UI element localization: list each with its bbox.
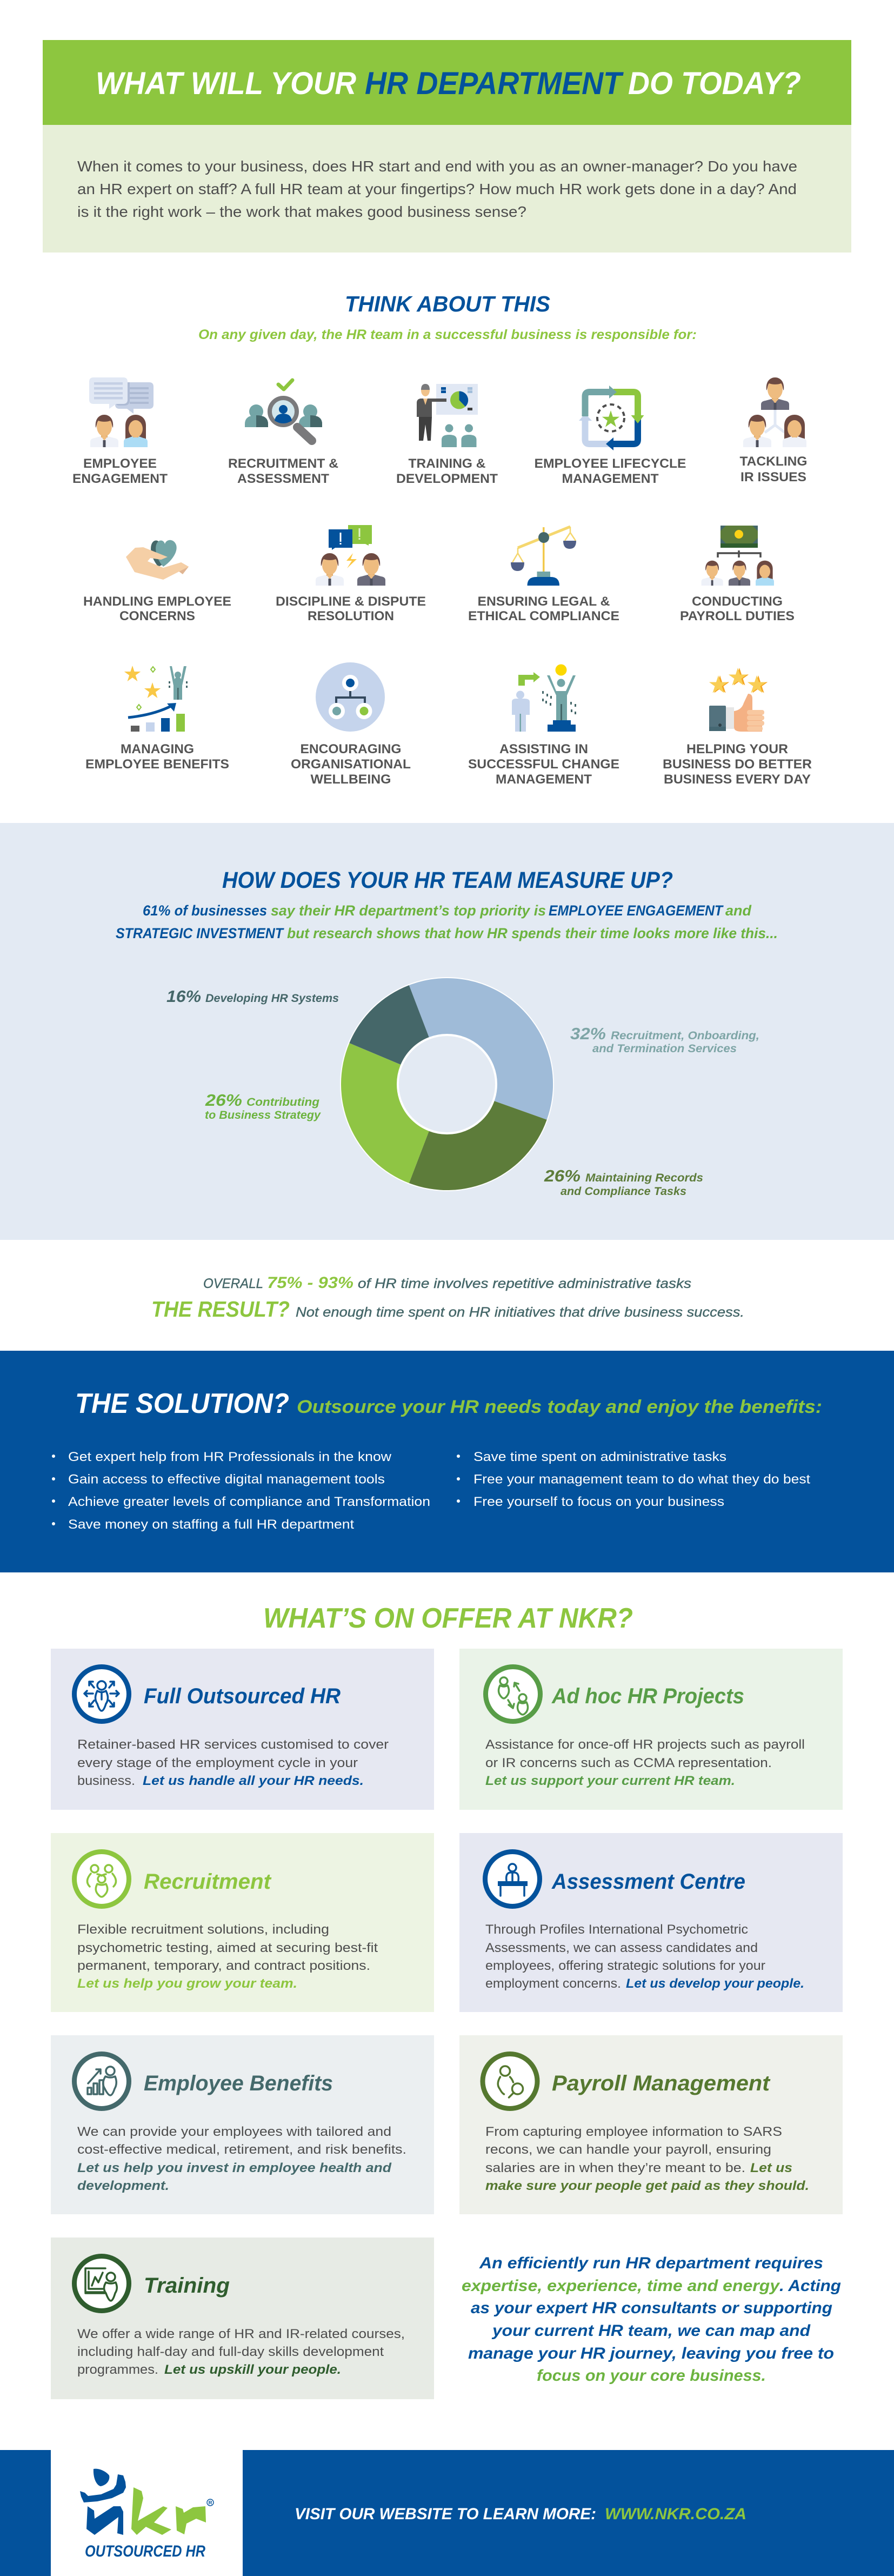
item: managing employee benefits: EMPLOYEE BENEFITS [85, 757, 229, 772]
card text [77, 2327, 405, 2377]
icon: organisation chart in circle [316, 662, 385, 732]
card text: make sure your people get paid as they should. [485, 2179, 809, 2193]
statement text: say their HR department’s top priority is [271, 902, 546, 919]
item: ensuring legal and ethical compliance: ETHICAL COMPLIANCE [468, 609, 619, 623]
icon: scales [511, 527, 576, 586]
card: ad hoc HR projects [459, 1649, 843, 1810]
card title: Employee Benefits [144, 2072, 333, 2095]
callout: efficiently run HR department [462, 2254, 841, 2385]
item: encouraging organisational wellbeing: ORGANISATIONAL [291, 757, 411, 772]
item: assisting in successful change management: MANAGEMENT [496, 772, 592, 787]
item: employee engagement [72, 377, 168, 486]
card text: including half-day and full-day skills development [77, 2345, 384, 2359]
card title: Full Outsourced HR [144, 1684, 341, 1708]
item: tackling IR issues: TACKLING [739, 454, 808, 469]
label: 16 percent developing HR systems: 16% [166, 987, 201, 1006]
item: managing employee benefits [85, 666, 229, 772]
card text: Let us support your current HR team. [485, 1774, 735, 1788]
card text: Let us help you grow your team. [77, 1976, 297, 1991]
icon: trainer with screen [75, 2256, 129, 2311]
panel: how does your HR team measure up [0, 823, 894, 1240]
card text [77, 1737, 389, 1788]
card text [485, 1922, 804, 1991]
callout: efficiently run HR department: expertise, experience, time and energy [462, 2277, 780, 2295]
icon: lifecycle arrows [579, 386, 644, 450]
icon: person with growth chart [75, 2054, 129, 2109]
card text: Let us [750, 2161, 792, 2175]
item: employee engagement: ENGAGEMENT [72, 472, 168, 486]
label: 26 percent maintaining records: 26% [544, 1166, 581, 1185]
statement text: EMPLOYEE ENGAGEMENT [549, 902, 724, 919]
icon: two people exchanging [485, 1667, 541, 1722]
item: encouraging organisational wellbeing: ENCOURAGING [301, 742, 401, 756]
card text: From capturing employee information to SARS [485, 2124, 782, 2139]
item: training and development [396, 384, 498, 486]
item: assisting in successful change management [468, 664, 619, 787]
label: 32 percent recruitment: and Termination Services [592, 1043, 737, 1055]
item: training and development: DEVELOPMENT [396, 472, 498, 486]
callout: efficiently run HR department: An efficiently run HR department requires [479, 2254, 823, 2272]
label: 26 percent maintaining records: and Compliance Tasks [561, 1185, 686, 1198]
card text: Let us upskill your people. [164, 2362, 341, 2377]
item: discipline and dispute resolution [276, 525, 426, 623]
item: recruitment and assessment [228, 380, 338, 486]
benefits list: left column: Gain access to effective digital management tools [68, 1472, 385, 1487]
statement text [116, 902, 778, 941]
card text: recons, we can handle your payroll, ensuring [485, 2142, 771, 2157]
icon: person with outward arrows [75, 1667, 129, 1722]
card text [77, 2124, 406, 2193]
icon: two people talking [89, 377, 154, 447]
label: 32 percent recruitment [570, 1024, 759, 1055]
text block: overall admin time [203, 1274, 691, 1292]
text block: the result [151, 1297, 744, 1322]
icon: banknote above staff [702, 526, 774, 586]
item: discipline and dispute resolution: DISCIPLINE & DISPUTE [276, 594, 426, 609]
item: assisting in successful change management: ASSISTING IN [499, 742, 588, 756]
icon: hand holding heart [126, 540, 189, 580]
text block: overall admin time: 75% - 93% [267, 1274, 353, 1292]
benefits list: left column: Achieve greater levels of compliance and Transformation [68, 1495, 430, 1509]
card text: programmes. [77, 2362, 158, 2377]
callout: efficiently run HR department: focus on your core business. [537, 2367, 766, 2385]
card text: psychometric testing, aimed at securing best-fit [77, 1941, 378, 1955]
label: 26 percent contributing to strategy: to Business Strategy [205, 1109, 321, 1121]
label: 26 percent contributing to strategy [205, 1091, 321, 1121]
card text: Flexible recruitment solutions, including [77, 1922, 329, 1937]
heading: HOW DOES YOUR HR TEAM MEASURE UP? [222, 867, 673, 893]
item: conducting payroll duties [680, 526, 795, 623]
text block: the result: Not enough time spent on HR initiatives that drive business success. [296, 1305, 744, 1320]
label: 26 percent maintaining records: Maintaining Records [585, 1172, 703, 1184]
label: 32 percent recruitment: Recruitment, Onboarding, [611, 1030, 759, 1042]
icon: group of people [75, 1851, 129, 1907]
logo: NKR outsourced HR: OUTSOURCED HR [85, 2542, 205, 2560]
donut chart [340, 977, 554, 1191]
text block: overall admin time: of HR time involves repetitive administrative tasks [358, 1276, 691, 1291]
item: ensuring legal and ethical compliance [468, 527, 619, 623]
label: 26 percent contributing to strategy: 26% [205, 1091, 242, 1110]
card text: Let us develop your people. [626, 1976, 804, 1991]
icon: stars and growth bars [124, 666, 188, 732]
subheading: responsibilities: On any given day, the HR team in a successful business is responsible for: [198, 327, 697, 342]
card text: business. [77, 1774, 135, 1788]
heading: think about this: THINK ABOUT THIS [345, 291, 550, 316]
heading: THE SOLUTION? [75, 1388, 289, 1419]
benefits list: right column [457, 1450, 810, 1509]
statement text: and [725, 902, 752, 919]
heading [75, 1388, 822, 1419]
item: conducting payroll duties: PAYROLL DUTIES [680, 609, 795, 623]
statement text: STRATEGIC INVESTMENT [116, 925, 285, 941]
card: training [51, 2238, 434, 2399]
benefits list: left column: Get expert help from HR Professionals in the know [68, 1450, 392, 1464]
card text: or IR concerns such as CCMA representation. [485, 1756, 772, 1770]
card title: Payroll Management [552, 2072, 771, 2095]
card text: Let us handle all your HR needs. [143, 1774, 364, 1788]
benefits list: left column: Save money on staffing a full HR department [68, 1517, 354, 1532]
item: helping your business do better: BUSINESS EVERY DAY [664, 772, 811, 787]
item: helping your business do better: HELPING YOUR [686, 742, 788, 756]
item: handling employee concerns: CONCERNS [119, 609, 195, 623]
title: HR DEPARTMENT [365, 66, 624, 101]
item: training and development: TRAINING & [409, 456, 485, 471]
item: managing employee benefits: MANAGING [121, 742, 194, 756]
label: 26 percent maintaining records [544, 1166, 703, 1198]
card: full outsourced HR [51, 1649, 434, 1810]
panel: the solution [0, 1351, 894, 1572]
icon: thumbs up with stars [709, 668, 768, 732]
item: conducting payroll duties: CONDUCTING [692, 594, 783, 609]
label: 26 percent contributing to strategy: Contributing [246, 1096, 319, 1108]
item: handling employee concerns: HANDLING EMPLOYEE [83, 594, 231, 609]
card text: every stage of the employment cycle in your [77, 1756, 358, 1770]
label: 16 percent developing HR systems: Developing HR Systems [205, 992, 339, 1005]
panel: title banner [43, 40, 851, 125]
item: assisting in successful change management: SUCCESSFUL CHANGE [468, 757, 619, 772]
item: encouraging organisational wellbeing [291, 662, 411, 787]
card text: permanent, temporary, and contract positions. [77, 1958, 370, 1973]
item: employee lifecycle management: EMPLOYEE LIFECYCLE [534, 456, 686, 471]
callout: efficiently run HR department: your current HR team, we can map and [491, 2322, 811, 2340]
title: WHAT WILL YOUR [96, 66, 356, 101]
card text: We can provide your employees with tailored and [77, 2124, 391, 2139]
card title: Training [144, 2274, 230, 2298]
heading: what's on offer: WHAT’S ON OFFER AT NKR? [263, 1603, 633, 1634]
icon: magnifier over candidates [245, 380, 322, 441]
label: 32 percent recruitment: 32% [570, 1024, 606, 1043]
title [96, 66, 801, 101]
heading: Outsource your HR needs today and enjoy the benefits: [297, 1397, 822, 1417]
icon: two people in dispute [316, 525, 385, 586]
card text: Assessments, we can assess candidates and [485, 1941, 758, 1955]
logo: NKR outsourced HR [80, 2469, 214, 2560]
call to action: WWW.NKR.CO.ZA [605, 2505, 746, 2523]
panel: intro text: an HR expert on staff? A full HR team at your fingertips? How much HR work gets done in a day? And [77, 181, 797, 197]
panel: intro text [43, 125, 851, 253]
item: encouraging organisational wellbeing: WELLBEING [310, 772, 391, 787]
card text: We offer a wide range of HR and IR-related courses, [77, 2327, 405, 2341]
benefits list: right column: Save time spent on administrative tasks [473, 1450, 726, 1464]
panel: intro text: is it the right work – the work that makes good business sense? [77, 203, 526, 220]
item: helping your business do better: BUSINESS DO BETTER [663, 757, 812, 772]
item: employee lifecycle management: MANAGEMENT [562, 472, 659, 486]
statement text: 61% of businesses [143, 902, 267, 919]
statement text: but research shows that how HR spends their time looks more like this... [287, 925, 778, 941]
card title: Ad hoc HR Projects [551, 1684, 744, 1708]
card text: Assistance for once-off HR projects such as payroll [485, 1737, 805, 1752]
card text: cost-effective medical, retirement, and risk benefits. [77, 2142, 406, 2157]
card text [77, 1922, 378, 1991]
icon: person transforming into leader [512, 664, 576, 732]
item: handling employee concerns [83, 540, 231, 623]
call to action: VISIT OUR WEBSITE TO LEARN MORE: [295, 2505, 596, 2523]
panel: intro text: When it comes to your business, does HR start and end with you as an owner-manager? Do you have [77, 158, 797, 175]
card: employee benefits [51, 2035, 434, 2214]
card text: Through Profiles International Psychometric [485, 1922, 748, 1937]
card text: Let us help you invest in employee health and [77, 2161, 392, 2175]
label: 16 percent developing HR systems [166, 987, 339, 1006]
callout: efficiently run HR department: manage your HR journey, leaving you free to [468, 2345, 834, 2362]
panel: footer [0, 2450, 894, 2576]
item: employee engagement: EMPLOYEE [83, 456, 157, 471]
item: recruitment and assessment: RECRUITMENT & [228, 456, 338, 471]
card text: development. [77, 2179, 169, 2193]
card text [485, 2124, 809, 2193]
callout: efficiently run HR department: as your expert HR consultants or supporting [471, 2299, 832, 2317]
item: helping your business do better [663, 668, 812, 787]
card text: employees, offering strategic solutions for your [485, 1958, 765, 1973]
card: payroll management [459, 2035, 843, 2214]
card text: salaries are in when they’re meant to be. [485, 2161, 745, 2175]
card: recruitment [51, 1833, 434, 2012]
card: assessment centre [459, 1833, 843, 2012]
call to action [295, 2505, 746, 2523]
logo: NKR outsourced HR: R [209, 2500, 212, 2506]
benefits list: right column: Free your management team to do what they do best [473, 1472, 810, 1487]
icon: presenter with chart [417, 384, 478, 447]
item: ensuring legal and ethical compliance: ENSURING LEGAL & [478, 594, 610, 609]
card text: employment concerns. [485, 1976, 621, 1991]
text block: overall admin time: OVERALL [203, 1276, 263, 1291]
item: tackling IR issues: IR ISSUES [740, 470, 806, 484]
icon: person with magnifier [483, 2054, 537, 2109]
title: DO TODAY? [628, 66, 801, 101]
benefits list: right column: Free yourself to focus on your business [473, 1495, 724, 1509]
item: employee lifecycle management [534, 386, 686, 486]
item: recruitment and assessment: ASSESSMENT [237, 472, 329, 486]
item: discipline and dispute resolution: RESOLUTION [308, 609, 394, 623]
icon: manager with two employees [743, 377, 806, 447]
callout: efficiently run HR department: . Acting [779, 2277, 841, 2295]
item: tackling IR issues [739, 377, 808, 484]
card title: Assessment Centre [551, 1870, 745, 1894]
card text: Retainer-based HR services customised to cover [77, 1737, 389, 1752]
benefits list: left column [52, 1450, 430, 1532]
icon: person at lectern [485, 1851, 539, 1907]
card title: Recruitment [144, 1870, 272, 1894]
card text [485, 1737, 805, 1788]
text block: the result: THE RESULT? [151, 1297, 290, 1322]
